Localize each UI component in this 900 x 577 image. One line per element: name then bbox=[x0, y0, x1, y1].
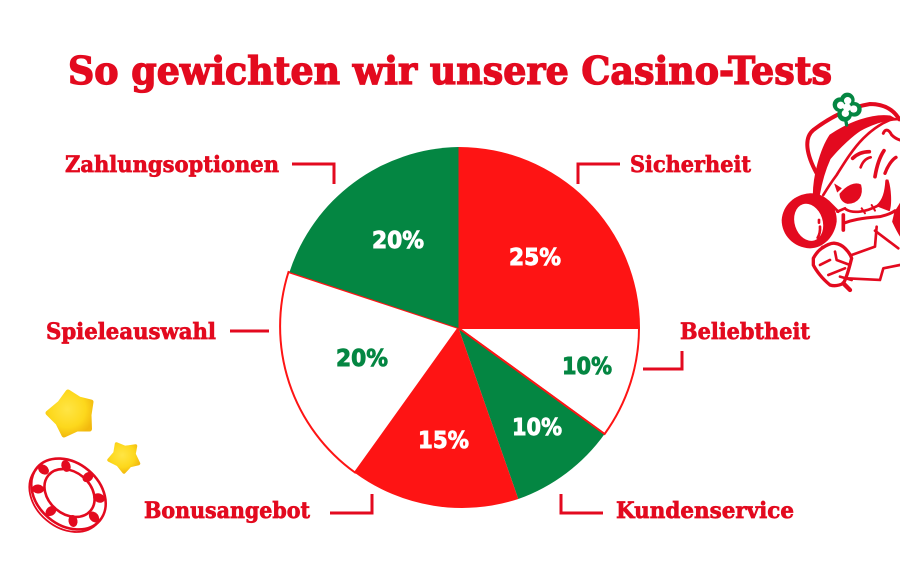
label: Zahlungsoptionen: Zahlungsoptionen bbox=[65, 152, 279, 178]
clover stem bbox=[845, 118, 847, 125]
value: 15%: 15% bbox=[418, 428, 469, 454]
leader: Zahlungsoptionen bbox=[292, 164, 334, 184]
chip markers bbox=[32, 459, 106, 528]
collar bbox=[843, 211, 895, 223]
label: Spieleauswahl: Spieleauswahl bbox=[46, 319, 216, 345]
clover green leaves bbox=[833, 93, 862, 122]
leader: Spieleauswahl bbox=[230, 330, 269, 332]
label: Bonusangebot: Bonusangebot bbox=[144, 498, 311, 524]
chip inner ring bbox=[35, 459, 104, 527]
hand bbox=[813, 243, 852, 286]
magnifying glass bbox=[782, 193, 837, 248]
leader: Sicherheit bbox=[578, 164, 620, 184]
cap band bbox=[813, 116, 895, 195]
clover white centre bbox=[837, 97, 857, 117]
face edge bbox=[823, 119, 900, 195]
body bbox=[852, 227, 877, 255]
value: 10% Beliebtheit: 10% bbox=[562, 354, 612, 380]
icon: casino chip bbox=[15, 444, 120, 547]
label: Kundenservice: Kundenservice bbox=[616, 498, 794, 524]
icon: small star bbox=[109, 444, 138, 472]
icon: mascot with magnifying glass bbox=[782, 93, 900, 290]
nose bbox=[840, 184, 861, 203]
leader: Bonusangebot bbox=[330, 494, 372, 513]
value: 20% Zahlungsoptionen: 20% bbox=[372, 228, 424, 254]
pie chart bbox=[280, 147, 640, 508]
eye marks bbox=[853, 152, 869, 158]
slice: Beliebtheit 10% bbox=[458, 328, 639, 434]
title: So gewichten wir unsere Casino-Tests bbox=[68, 48, 832, 93]
leader: Kundenservice bbox=[561, 494, 603, 513]
chip back rim bbox=[15, 446, 118, 547]
mouth bbox=[846, 181, 887, 212]
value: 20% Spieleauswahl: 20% bbox=[336, 346, 388, 372]
value: 25%: 25% bbox=[509, 245, 561, 271]
lens handle bbox=[823, 248, 826, 252]
slice: Sicherheit 25% bbox=[458, 147, 640, 328]
leader: Beliebtheit bbox=[643, 351, 682, 369]
label: Beliebtheit: Beliebtheit bbox=[680, 319, 811, 345]
clover bbox=[833, 93, 862, 125]
value: 10% Kundenservice: 10% bbox=[512, 415, 562, 441]
label: Sicherheit: Sicherheit bbox=[630, 152, 752, 178]
icon: large star bbox=[48, 392, 91, 435]
slice: Zahlungsoptionen 20% bbox=[290, 147, 458, 328]
slice: Spieleauswahl 20% bbox=[280, 272, 458, 472]
slice: Kundenservice 10% bbox=[458, 328, 605, 499]
cap outline bbox=[807, 104, 899, 173]
line between white and green slices bbox=[458, 328, 605, 434]
slice: Bonusangebot 15% bbox=[355, 328, 518, 508]
chip face bbox=[17, 444, 120, 544]
